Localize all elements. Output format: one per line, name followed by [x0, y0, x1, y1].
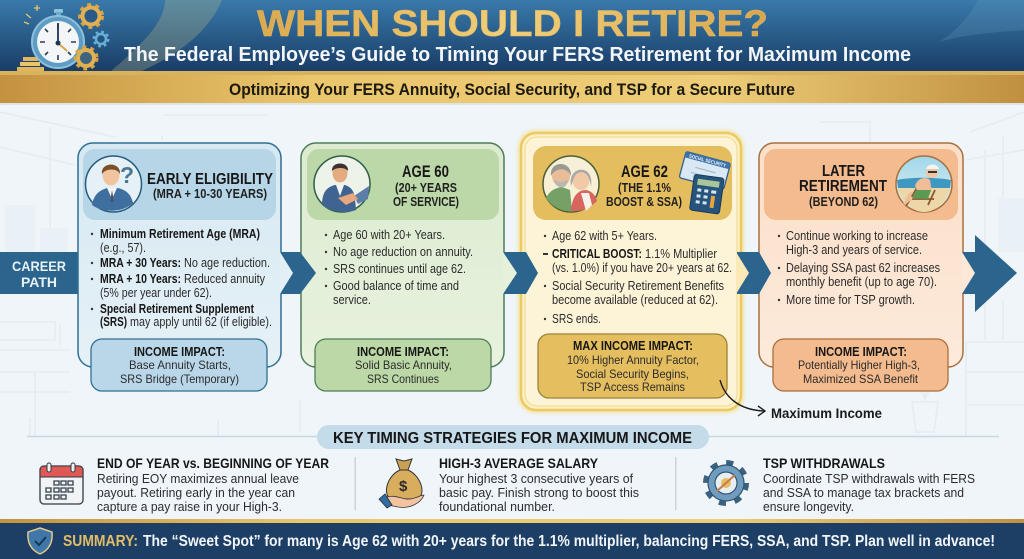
icon: stopwatch with gears and coins	[17, 5, 108, 71]
max income impact: 10% Higher Annuity Factor,	[567, 353, 699, 367]
bullet list: may apply until 62 (if eligible).	[130, 315, 272, 329]
bullet list: 1.1% Multiplier	[645, 247, 717, 261]
arrow: age 62 to later retirement	[736, 252, 771, 294]
background office scene	[0, 102, 1024, 519]
panel: later retirement: RETIREMENT	[799, 178, 887, 195]
bullet list: Delaying SSA past 62 increases	[786, 261, 940, 275]
icon: gear	[706, 463, 746, 503]
strategy: end of year	[40, 455, 329, 514]
bullet list: Reduced annuity	[184, 272, 266, 286]
panel header	[307, 149, 499, 220]
panel: age 62 highlighted	[519, 131, 743, 412]
panel header	[764, 149, 958, 220]
summary bar: SUMMARY:	[63, 533, 138, 550]
bullet list	[778, 229, 940, 307]
bullet list: monthly benefit (up to age 70).	[786, 275, 937, 289]
panel header	[533, 146, 732, 220]
heading: key timing strategies	[27, 425, 999, 449]
divider	[675, 457, 676, 510]
icon: social security card and calculator	[679, 151, 731, 214]
panel: later retirement: (BEYOND 62)	[809, 194, 878, 209]
icon: money bag in hand: $	[399, 478, 408, 495]
heading: EARLY ELIGIBILITY	[147, 171, 273, 188]
bullet list: No age reduction on annuity.	[333, 245, 473, 259]
strategy: high-3: foundational number.	[439, 499, 555, 514]
bullet list: (5% per year under 62).	[100, 286, 212, 300]
bullet list: Good balance of time and	[333, 279, 459, 293]
icon: retiree on beach	[896, 156, 952, 212]
strategy: high-3: Your highest 3 consecutive years of	[439, 471, 633, 486]
max income impact: Social Security Begins,	[576, 367, 689, 381]
bullet list	[91, 227, 272, 329]
bullet list: High-3 and years of service.	[786, 243, 922, 257]
income impact: INCOME IMPACT:	[134, 345, 225, 359]
header banner	[0, 0, 1024, 72]
bullet list: SRS ends.	[552, 312, 601, 326]
strategy: end of year: capture a pay raise in your High-3.	[97, 499, 282, 514]
bullet list	[325, 228, 473, 307]
icon: older couple	[543, 156, 599, 212]
divider	[354, 457, 356, 510]
income impact: Maximized SSA Benefit	[803, 372, 919, 386]
strategy: tsp withdrawals: TSP WITHDRAWALS	[763, 455, 885, 471]
income impact: SRS Continues	[367, 372, 439, 386]
bullet list: CRITICAL BOOST:	[552, 247, 642, 261]
gold tagline band	[0, 71, 1024, 105]
callout: maximum income: Maximum Income	[771, 405, 882, 421]
income impact	[315, 339, 491, 391]
icon: social security card and calculator: SOCIAL SECURITY	[688, 153, 727, 169]
icon: shield	[28, 528, 52, 554]
panel: later retirement	[759, 143, 963, 391]
bullet list: service.	[333, 293, 371, 307]
title: WHEN SHOULD I RETIRE?	[257, 3, 768, 44]
income impact: Solid Basic Annuity,	[355, 358, 452, 372]
bullet list: Age 60 with 20+ Years.	[333, 228, 445, 242]
bullet list: Social Security Retirement Benefits	[552, 279, 724, 293]
bullet list: (e.g., 57).	[100, 241, 146, 255]
panel header	[83, 149, 276, 220]
subtitle: The Federal Employee’s Guide to Timing Your FERS Retirement for Maximum Income	[124, 44, 911, 66]
bullet list: Age 62 with 5+ Years.	[552, 229, 657, 243]
bullet list	[543, 229, 732, 326]
heading: AGE 62	[621, 162, 668, 181]
income impact: SRS Bridge (Temporary)	[120, 372, 239, 386]
max income impact: MAX INCOME IMPACT:	[573, 339, 693, 353]
panel: age 60	[301, 143, 504, 391]
career path band: PATH	[21, 274, 57, 290]
panel: age 60: OF SERVICE)	[393, 194, 459, 209]
strategy: high-3: basic pay. Finish strong to boost this	[439, 485, 639, 500]
bullet list: (vs. 1.0%) if you have 20+ years at 62.	[552, 261, 732, 275]
tagline: Optimizing Your FERS Annuity, Social Security, and TSP for a Secure Future	[229, 80, 795, 99]
bullet list: Continue working to increase	[786, 229, 928, 243]
bullet list: MRA + 10 Years:	[100, 272, 181, 286]
heading: LATER	[822, 163, 865, 180]
max income impact: TSP Access Remains	[580, 380, 685, 394]
bullet list: SRS continues until age 62.	[333, 262, 466, 276]
bullet list: Minimum Retirement Age (MRA)	[100, 227, 260, 241]
strategy: high-3: HIGH-3 AVERAGE SALARY	[439, 455, 599, 471]
strategy: end of year: payout. Retiring early in the year can	[97, 485, 295, 500]
icon: money bag in hand	[379, 459, 424, 508]
icon: worried employee: ?	[120, 162, 134, 188]
income impact	[91, 339, 267, 391]
bullet list: become available (reduced at 62).	[552, 293, 718, 307]
bullet list: More time for TSP growth.	[786, 293, 915, 307]
strategy: tsp withdrawals: Coordinate TSP withdrawals with FERS	[763, 471, 975, 486]
arrow: age 60 to age 62	[503, 252, 538, 294]
income impact: INCOME IMPACT:	[357, 345, 449, 359]
arrow: career path continues	[962, 235, 1017, 312]
panel: early eligibility	[78, 143, 281, 391]
strategy: tsp withdrawals	[706, 455, 975, 514]
max income impact	[538, 334, 727, 398]
strategy: tsp withdrawals: and SSA to manage tax brackets and	[763, 485, 964, 500]
strategy: tsp withdrawals: ensure longevity.	[763, 499, 854, 514]
summary bar	[0, 519, 1024, 559]
panel: age 62 highlighted: BOOST & SSA)	[606, 194, 682, 209]
heading: key timing strategies: KEY TIMING STRATEGIES FOR MAXIMUM INCOME	[333, 430, 692, 447]
bullet list: MRA + 30 Years:	[100, 256, 181, 270]
income impact: Potentially Higher High-3,	[798, 358, 920, 372]
icon: worried employee	[86, 156, 142, 212]
career path band	[0, 252, 80, 294]
income impact: Base Annuity Starts,	[129, 358, 231, 372]
panel: age 60: (20+ YEARS	[395, 180, 457, 195]
callout: maximum income	[720, 380, 882, 421]
strategy: end of year: Retiring EOY maximizes annual leave	[97, 471, 299, 486]
icon: calendar	[40, 463, 83, 504]
bullet list: (SRS)	[100, 315, 127, 329]
income impact: INCOME IMPACT:	[815, 345, 907, 359]
bullet list: Special Retirement Supplement	[100, 302, 255, 316]
strategy: end of year: END OF YEAR vs. BEGINNING OF YEAR	[97, 455, 329, 471]
panel: early eligibility: (MRA + 10-30 YEARS)	[153, 186, 267, 201]
heading: AGE 60	[402, 162, 449, 181]
arrow: early eligibility to age 60	[280, 252, 316, 294]
icon: handshake	[314, 156, 370, 212]
bullet list: No age reduction.	[184, 256, 270, 270]
strategy: high-3	[379, 455, 639, 514]
income impact	[773, 339, 948, 391]
career path band: CAREER	[12, 258, 66, 274]
panel: age 62 highlighted: (THE 1.1%	[618, 180, 671, 195]
